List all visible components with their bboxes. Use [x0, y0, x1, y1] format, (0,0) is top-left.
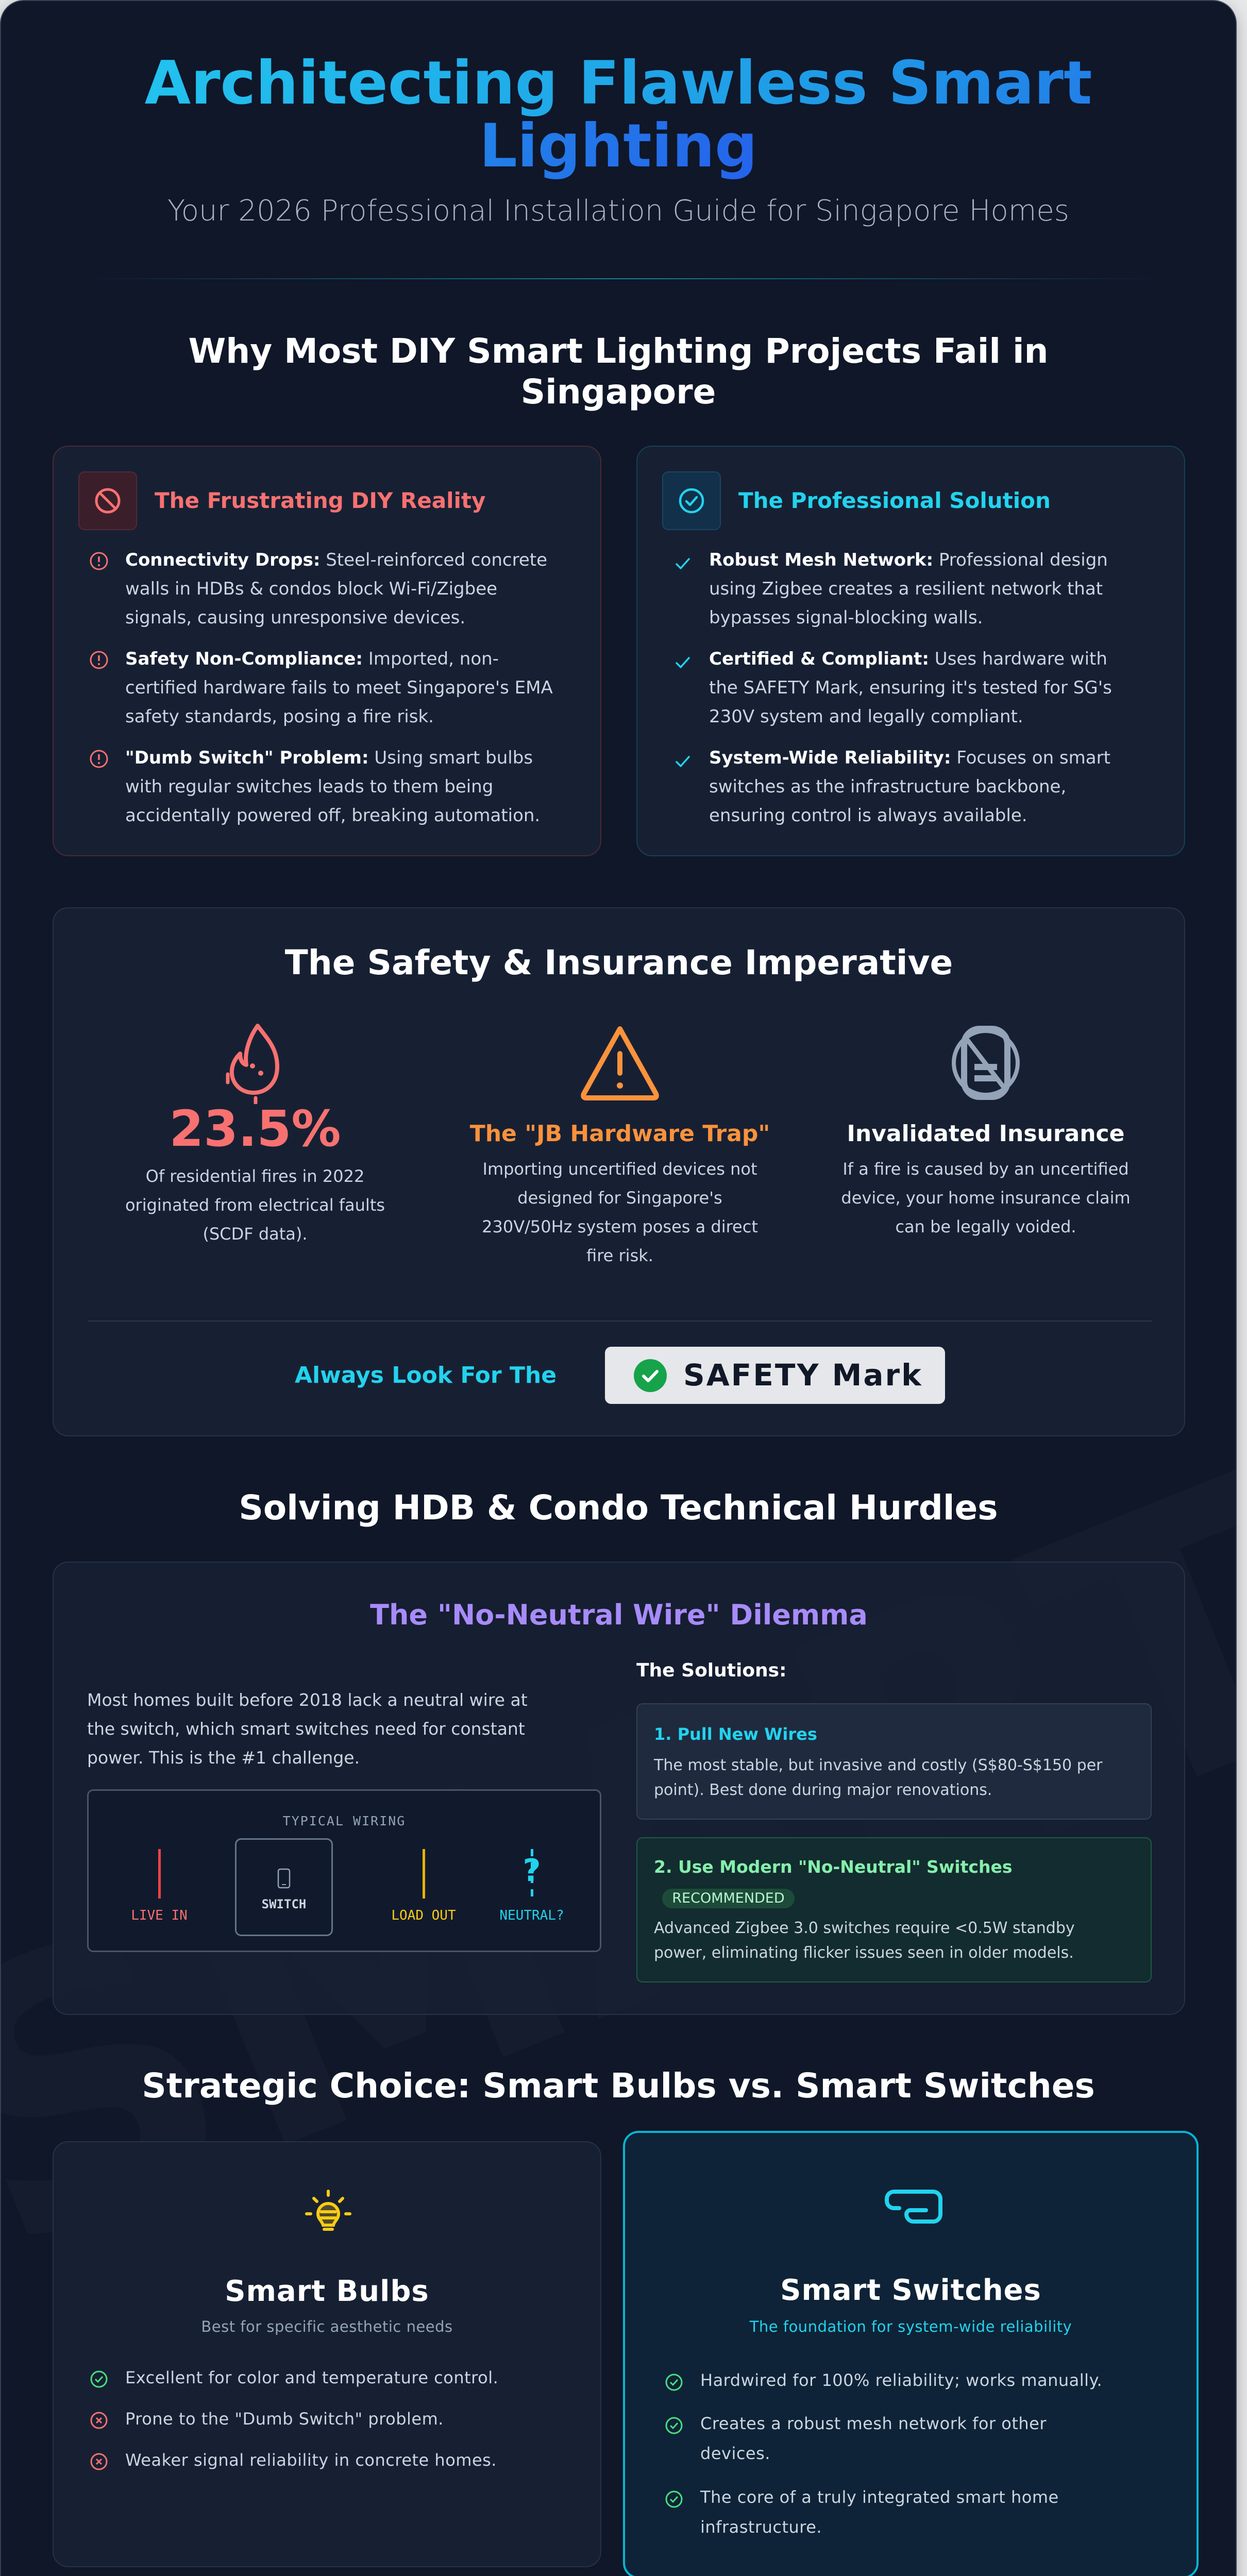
heading: The Professional Solution: [738, 488, 1051, 513]
heading: Smart Switches: [780, 2274, 1041, 2307]
solution 2: power, eliminating flicker issues seen in older models.: [654, 1944, 1074, 1962]
title: Lighting: [479, 111, 757, 181]
stat: JB hardware trap: 230V/50Hz system poses a direct: [482, 1217, 758, 1236]
text: explanation: power. This is the #1 challenge.: [87, 1748, 360, 1768]
heading: HDB & condo: Solving HDB & Condo Technical Hurdles: [239, 1488, 998, 1528]
heading: Smart Bulbs: [225, 2275, 429, 2308]
stat: JB hardware trap: fire risk.: [586, 1246, 653, 1265]
list: bulb pros/cons: [91, 2368, 498, 2470]
item: signals, causing unresponsive devices.: [125, 607, 465, 628]
wire: load out: LOAD OUT: [391, 1908, 456, 1923]
item: safety standards, posing a fire risk.: [125, 706, 434, 727]
panel: professional solution: [636, 446, 1185, 856]
heading: The Safety & Insurance Imperative: [285, 943, 953, 982]
panel: smart switches: [623, 2131, 1199, 2576]
stat: JB hardware trap: [470, 1026, 770, 1265]
solution 1: 1. Pull New Wires: [654, 1724, 817, 1744]
solution 2: [636, 1837, 1152, 1982]
list: switch pros: The core of a truly integrated smart home: [700, 2487, 1059, 2507]
item: 230V system and legally compliant.: [709, 706, 1023, 727]
heading: strategic choice: Strategic Choice: Smart Bulbs vs. Smart Switches: [142, 2066, 1095, 2106]
item: [676, 550, 1108, 628]
panel: smart bulbs: Best for specific aesthetic needs: [201, 2318, 453, 2335]
wire: neutral?: NEUTRAL?: [499, 1908, 564, 1923]
item: with regular switches leads to them being: [125, 776, 493, 797]
switch box: SWITCH: [262, 1897, 306, 1911]
heading: solutions: The Solutions:: [636, 1660, 786, 1681]
heading: The Frustrating DIY Reality: [155, 488, 485, 513]
text: explanation: Most homes built before 2018 lack a neutral wire at: [87, 1690, 528, 1710]
stat: invalidated insurance: can be legally voided.: [895, 1217, 1076, 1236]
icon: warning: [581, 1026, 659, 1100]
title: Architecting Flawless Smart: [145, 48, 1092, 118]
item: Connectivity Drops: Steel-reinforced concrete: [125, 550, 547, 570]
list: bulb pros/cons: Weaker signal reliability in concrete homes.: [125, 2450, 497, 2470]
list: bulb pros/cons: Excellent for color and temperature control.: [125, 2368, 498, 2387]
list: switch pros: Hardwired for 100% reliability; works manually.: [700, 2370, 1102, 2390]
badge: SAFETY Mark: SAFETY Mark: [683, 1358, 923, 1393]
panel: safety & insurance: [53, 907, 1185, 1436]
item: bypasses signal-blocking walls.: [709, 607, 983, 628]
diagram: typical wiring: [87, 1789, 601, 1952]
solution 1: The most stable, but invasive and costly (S$80-S$150 per: [654, 1756, 1103, 1774]
item: accidentally powered off, breaking automation.: [125, 805, 540, 826]
heading: The "No-Neutral Wire" Dilemma: [370, 1599, 868, 1631]
item: [90, 649, 553, 727]
item: the SAFETY Mark, ensuring it's tested for SG's: [709, 677, 1112, 698]
stat: 23.5%: (SCDF data).: [203, 1224, 308, 1244]
stat: invalidated insurance: Invalidated Insurance: [847, 1121, 1124, 1147]
text: explanation: the switch, which smart switches need for constant: [87, 1719, 525, 1739]
heading: why DIY fails: Singapore: [521, 372, 716, 412]
stat: 23.5%: Of residential fires in 2022: [146, 1166, 364, 1186]
icon: switch: [885, 2190, 942, 2224]
item: using Zigbee creates a resilient network that: [709, 579, 1103, 599]
icon: check circle: [662, 471, 721, 530]
solution 1: [636, 1703, 1152, 1820]
switch box: [235, 1838, 333, 1936]
text: explanation: [87, 1690, 528, 1768]
wire: neutral?: ?: [523, 1853, 541, 1889]
icon: voided document: [952, 1026, 1020, 1100]
item: [676, 649, 1112, 727]
item: System-Wide Reliability: Focuses on smart: [709, 748, 1110, 768]
icon: fire: [226, 1024, 279, 1104]
item: certified hardware fails to meet Singapore's EMA: [125, 677, 553, 698]
title: [145, 48, 1092, 181]
badge: recommended: RECOMMENDED: [672, 1890, 785, 1906]
solution 2: Advanced Zigbee 3.0 switches require <0.5W standby: [654, 1919, 1075, 1937]
safety mark callout: [295, 1347, 945, 1404]
wire: load out: [391, 1849, 456, 1923]
wire: live in: LIVE IN: [131, 1908, 188, 1923]
solution 1: point). Best done during major renovations.: [654, 1781, 992, 1799]
wire: live in: [131, 1849, 188, 1923]
panel: smart switches: The foundation for system-wide reliability: [750, 2318, 1072, 2335]
stat: JB hardware trap: designed for Singapore's: [517, 1188, 722, 1208]
stat: invalidated insurance: device, your home insurance claim: [841, 1188, 1131, 1208]
item: ensuring control is always available.: [709, 805, 1027, 826]
item: switches as the infrastructure backbone,: [709, 776, 1066, 797]
diagram: typical wiring: TYPICAL WIRING: [283, 1814, 406, 1828]
item: Certified & Compliant: Uses hardware with: [709, 649, 1107, 669]
item: walls in HDBs & condos block Wi-Fi/Zigbee: [125, 579, 497, 599]
subtitle: Your 2026 Professional Installation Guide for Singapore Homes: [167, 194, 1069, 228]
panel: DIY reality: [53, 446, 601, 856]
item: [676, 748, 1110, 826]
stat: 23.5%: 23.5%: [169, 1100, 341, 1158]
item: [90, 748, 540, 826]
stat: 23.5%: originated from electrical faults: [125, 1195, 385, 1215]
list: switch pros: [666, 2370, 1102, 2537]
item: Robust Mesh Network: Professional design: [709, 550, 1108, 570]
stat: invalidated insurance: If a fire is caused by an uncertified: [842, 1159, 1129, 1179]
solution 2: 2. Use Modern "No-Neutral" Switches: [654, 1857, 1012, 1877]
stat: JB hardware trap: The "JB Hardware Trap": [470, 1121, 770, 1147]
list: switch pros: infrastructure.: [700, 2517, 822, 2537]
item: [90, 550, 547, 628]
item: Safety Non-Compliance: Imported, non-: [125, 649, 499, 669]
safety mark callout: Always Look For The: [295, 1362, 557, 1388]
list: switch pros: Creates a robust mesh network for other: [700, 2414, 1047, 2433]
heading: why DIY fails: [188, 331, 1049, 412]
wire: neutral?: [499, 1849, 564, 1923]
list: bulb pros/cons: Prone to the "Dumb Switch" problem.: [125, 2409, 444, 2429]
stat: 23.5%: [125, 1024, 385, 1244]
panel: smart bulbs: [53, 2141, 601, 2567]
badge: recommended: [662, 1889, 795, 1908]
icon: ban: [78, 471, 137, 530]
list: switch pros: devices.: [700, 2444, 770, 2463]
stat: invalidated insurance: [841, 1026, 1131, 1236]
icon: bulb: [305, 2190, 351, 2231]
heading: why DIY fails: Why Most DIY Smart Lighting Projects Fail in: [188, 331, 1049, 371]
item: "Dumb Switch" Problem: Using smart bulbs: [125, 748, 533, 768]
stat: JB hardware trap: Importing uncertified devices not: [482, 1159, 757, 1179]
panel: no-neutral dilemma: [53, 1562, 1185, 2015]
badge: SAFETY Mark: [605, 1347, 945, 1404]
